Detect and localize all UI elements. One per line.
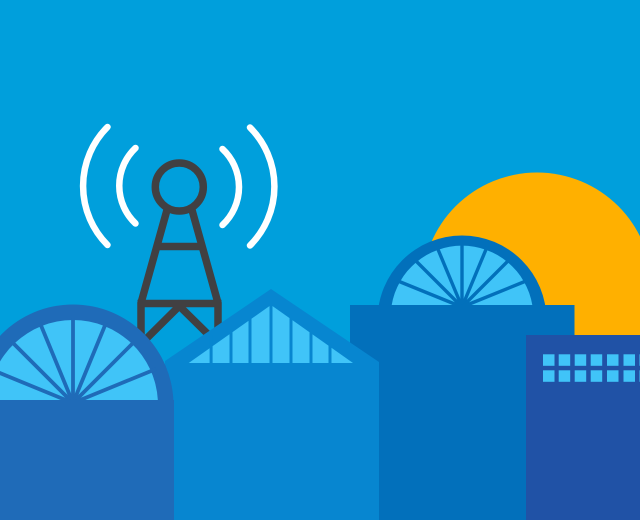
radio tower — [135, 163, 224, 350]
building: domed tower, centre — [350, 236, 574, 520]
arched window — [0, 318, 158, 403]
building: peaked roof hall — [165, 289, 379, 520]
office windows — [543, 354, 640, 382]
building: office block, right — [526, 335, 640, 520]
sun — [422, 172, 640, 402]
radio waves — [83, 127, 274, 246]
roof window — [189, 295, 353, 364]
building: arched dome, left — [0, 304, 174, 520]
dome window — [392, 245, 532, 307]
